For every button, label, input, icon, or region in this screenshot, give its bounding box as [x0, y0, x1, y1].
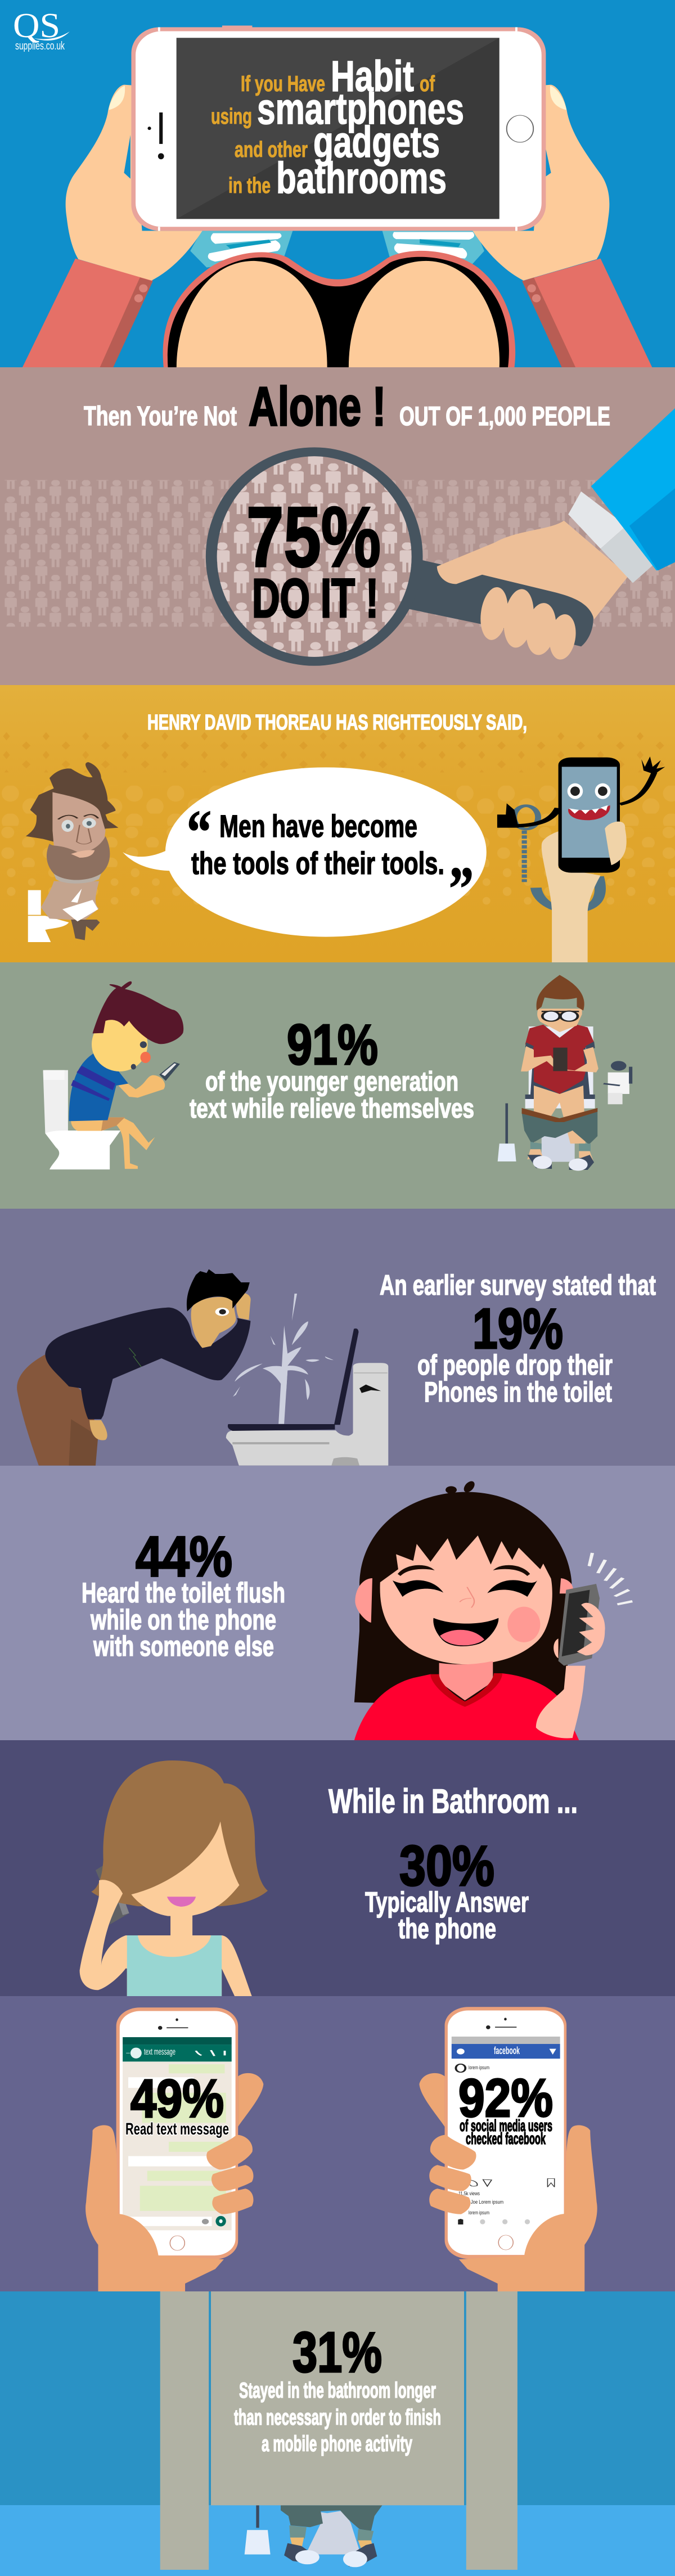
icon: magnifier: [206, 447, 593, 666]
icon: shocked man: [17, 1269, 251, 1466]
title: Habit: [331, 52, 414, 101]
icon: man with glasses on toilet: [498, 975, 631, 1171]
title: in the: [228, 174, 271, 198]
text: phone screen labels: Joe Lorem ipsum: [471, 2199, 503, 2205]
icon: smiling phone character: [497, 756, 665, 873]
statistic: 91%: of the younger generation: [205, 1067, 458, 1097]
text: phone screen labels: [144, 2045, 520, 2215]
icon: left hand holding phone: [86, 2125, 224, 2292]
quote text: the tools of their tools.: [191, 845, 444, 881]
statistic: 91%: 91%: [287, 1014, 378, 1077]
statistic: 31%: Stayed in the bathroom longer: [239, 2379, 436, 2403]
panel: not alone: [0, 367, 675, 685]
icon: laughing girl on the phone: [354, 1481, 633, 1740]
statistic: 31%: than necessary in order to finish: [234, 2406, 441, 2430]
statistic: 44%: Heard the toilet flush: [82, 1577, 285, 1609]
stall door: [211, 2291, 464, 2505]
title: [211, 52, 464, 202]
quote text: ”: [449, 854, 474, 923]
statistic: 44%: [82, 1525, 285, 1662]
halftone background: [0, 732, 675, 906]
panel: 30% answer the phone: [0, 1740, 675, 1996]
statistic: 30%: [328, 1782, 578, 1944]
statistic: 44%: 44%: [136, 1525, 232, 1588]
logo: QS: [13, 7, 60, 45]
statistic: 92%: of social media users: [460, 2117, 552, 2135]
heading: not alone: [84, 376, 610, 437]
illustration: Thoreau, bubble and phone: [0, 732, 675, 962]
panel: Thoreau quote: [0, 685, 675, 962]
title: and other: [235, 138, 308, 162]
panel: 31% stayed longer: [0, 2291, 675, 2576]
statistic: 44%: with someone else: [93, 1631, 274, 1662]
icon: shoes: [190, 231, 484, 268]
logo: supplies.co.uk: [15, 40, 65, 52]
panel: header: [0, 0, 675, 367]
statistic: 31%: a mobile phone activity: [262, 2432, 412, 2456]
speech bubble: [123, 767, 487, 937]
statistic: 31%: [234, 2321, 441, 2456]
statistic: 49%: Read text message: [125, 2120, 229, 2138]
icon: legs and toilet under the stall door: [245, 2505, 382, 2567]
icon: woman on the phone: [80, 1760, 268, 1996]
icon: handcuffs: [514, 806, 600, 911]
icon: toilet silhouette: [28, 890, 69, 942]
statistic: 92%: checked facebook: [466, 2130, 546, 2148]
statistic: 75%: DO IT !: [252, 568, 379, 629]
icon: forearm holding phone: [542, 830, 601, 962]
statistic: 75%: [246, 489, 381, 629]
quote text: [187, 798, 474, 923]
statistic: 30%: While in Bathroom ...: [328, 1782, 578, 1820]
heading: Thoreau: HENRY DAVID THOREAU HAS RIGHTEOUSLY SAID,: [147, 711, 527, 735]
title: gadgets: [313, 117, 440, 166]
panel: phones 49% and 92%: [0, 1996, 675, 2292]
statistic: 31%: 31%: [292, 2321, 382, 2384]
text: phone screen labels: lorem ipsum: [469, 2210, 489, 2215]
statistic: 91%: text while relieve themselves: [190, 1094, 474, 1124]
text: phone screen labels: 11.5k views: [458, 2191, 480, 2196]
icon: shirt cuff and sleeve: [568, 408, 675, 583]
icon: messaging phone: [116, 2007, 263, 2259]
heading: not alone: Alone !: [249, 376, 386, 437]
heading: not alone: Then You’re Not: [84, 402, 237, 431]
text: phone screen labels: facebook: [494, 2045, 520, 2056]
text: phone screen labels: text message: [144, 2047, 176, 2057]
statistic: 75%: 75%: [246, 489, 381, 585]
statistic: 44%: while on the phone: [90, 1604, 276, 1636]
illustration: crowd and magnifier: [0, 408, 675, 666]
icon: boy on toilet: [43, 981, 183, 1169]
statistic: 49%: 49%: [130, 2069, 224, 2129]
quote text: Men have become: [219, 808, 417, 844]
icon: hand holding magnifier: [437, 521, 628, 660]
icon: left hand: [66, 85, 202, 281]
text: phone screen labels: lorem ipsum: [469, 2065, 489, 2070]
statistic: 92%: [458, 2068, 553, 2148]
title: of: [420, 72, 435, 96]
icon: feed phone: [445, 2007, 566, 2259]
icon: fingers on phones: [206, 2135, 476, 2214]
icon: Thoreau caricature: [26, 762, 118, 940]
quote text: “: [187, 798, 212, 866]
panel: 19% drop phones: [0, 1209, 675, 1466]
panel: 44% toilet flush: [0, 1466, 675, 1740]
statistic: 19%: 19%: [472, 1298, 563, 1361]
title: using: [211, 105, 252, 129]
icon: right hand: [472, 85, 609, 281]
title: smartphones: [257, 84, 464, 133]
statistic: 19%: [380, 1269, 656, 1408]
illustration: hands holding phone over knees: [22, 25, 652, 367]
statistic: 92%: 92%: [458, 2068, 553, 2128]
icon: right hand holding phone: [419, 2073, 597, 2292]
icon: horizontal phone: [131, 25, 546, 231]
title: bathrooms: [276, 153, 447, 202]
icon: knees and shorts: [163, 251, 515, 367]
panel: 91% younger generation: [0, 962, 675, 1209]
statistic: 30%: 30%: [399, 1835, 494, 1898]
icon: toilet with water splash: [226, 1294, 388, 1466]
statistic: 30%: the phone: [398, 1913, 496, 1944]
title: If you Have: [241, 72, 325, 96]
icon: right sleeve: [522, 259, 652, 367]
stall posts: [160, 2291, 518, 2570]
icon: left sleeve: [22, 259, 153, 367]
statistic: 30%: Typically Answer: [365, 1886, 529, 1918]
statistic: 19%: of people drop their: [417, 1349, 613, 1381]
statistic: 91%: [190, 1014, 474, 1124]
crowd pattern: [0, 480, 675, 627]
logo: [13, 7, 70, 52]
